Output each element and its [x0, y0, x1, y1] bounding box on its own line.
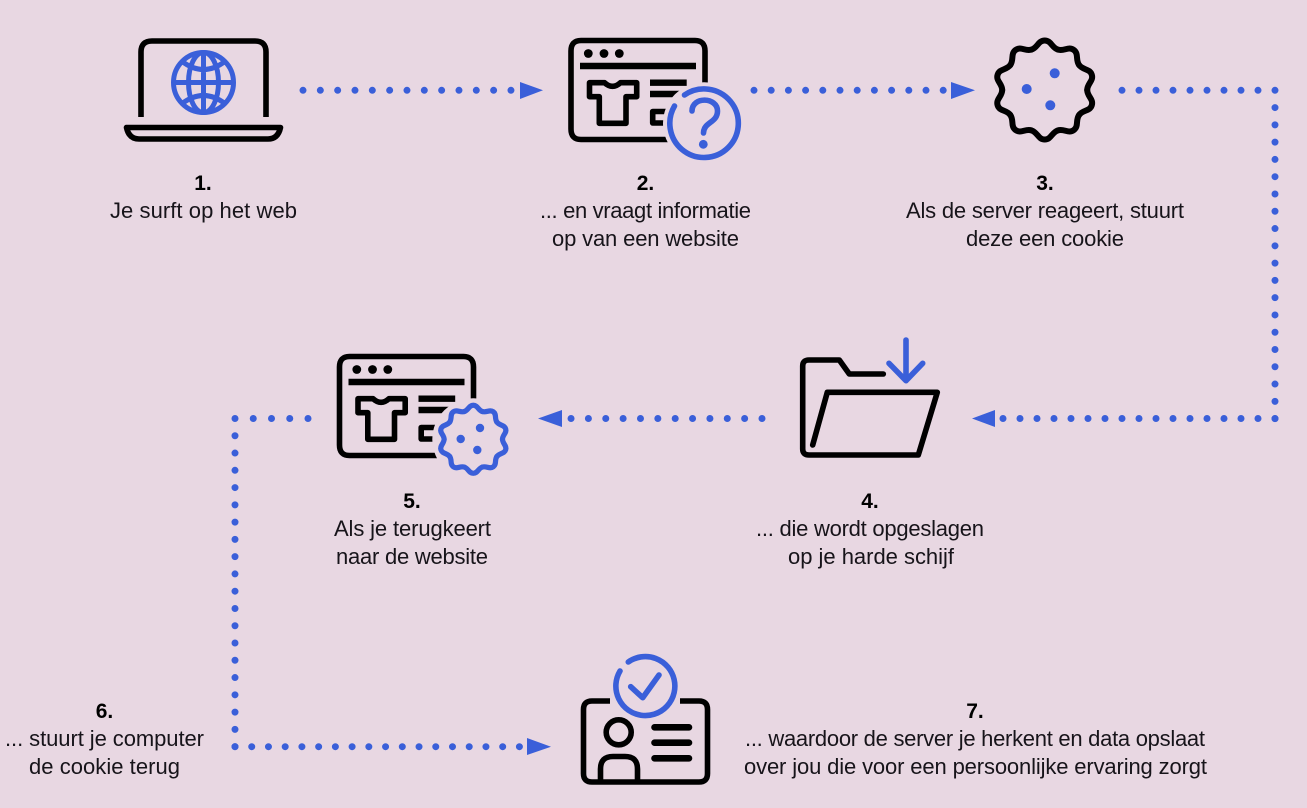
step 1 caption: 1. — [194, 172, 212, 195]
step 3 caption: 3. — [1036, 172, 1054, 195]
arrow: step 4 to step 5 — [538, 410, 762, 427]
step 5 caption: naar de website — [336, 544, 488, 569]
icon: browser with question mark — [571, 40, 745, 164]
step 5 caption — [334, 490, 491, 569]
step 2 caption: 2. — [637, 172, 654, 195]
step 2 caption: op van een website — [552, 226, 739, 251]
step 7 caption: ... waardoor de server je herkent en data opslaat — [745, 726, 1205, 751]
arrow: step 1 to step 2 — [303, 82, 543, 99]
icon: browser with cookie — [340, 356, 514, 480]
step 4 caption: op je harde schijf — [788, 544, 955, 569]
step 6 caption — [5, 700, 204, 779]
icon: cookie — [994, 40, 1096, 140]
step 2 caption: ... en vraagt informatie — [540, 198, 751, 223]
step 5 caption: 5. — [403, 490, 421, 513]
arrow: step 5 to step 7 via step 6 — [235, 418, 551, 755]
icon: folder with download arrow — [803, 340, 937, 455]
step 6 caption: de cookie terug — [29, 754, 180, 779]
step 4 caption — [756, 490, 984, 569]
icon: laptop with globe — [126, 41, 280, 139]
step 6 caption: 6. — [96, 700, 113, 723]
step 3 caption: deze een cookie — [966, 226, 1124, 251]
step 7 caption: 7. — [966, 700, 984, 723]
step 2 caption — [540, 172, 751, 251]
step 7 caption: over jou die voor een persoonlijke ervaring zorgt — [744, 754, 1207, 779]
arrow: step 2 to step 3 — [754, 82, 975, 99]
step 7 caption — [744, 700, 1207, 779]
step 5 caption: Als je terugkeert — [334, 516, 491, 541]
step 1 caption: Je surft op het web — [110, 198, 297, 223]
step 1 caption — [110, 172, 297, 223]
step 4 caption: 4. — [861, 490, 879, 513]
step 3 caption: Als de server reageert, stuurt — [906, 198, 1184, 223]
icon: ID card with check mark — [584, 657, 708, 782]
arrow: step 3 to step 4 — [972, 90, 1275, 427]
step 3 caption — [906, 172, 1184, 251]
step 6 caption: ... stuurt je computer — [5, 726, 204, 751]
step 4 caption: ... die wordt opgeslagen — [756, 516, 984, 541]
